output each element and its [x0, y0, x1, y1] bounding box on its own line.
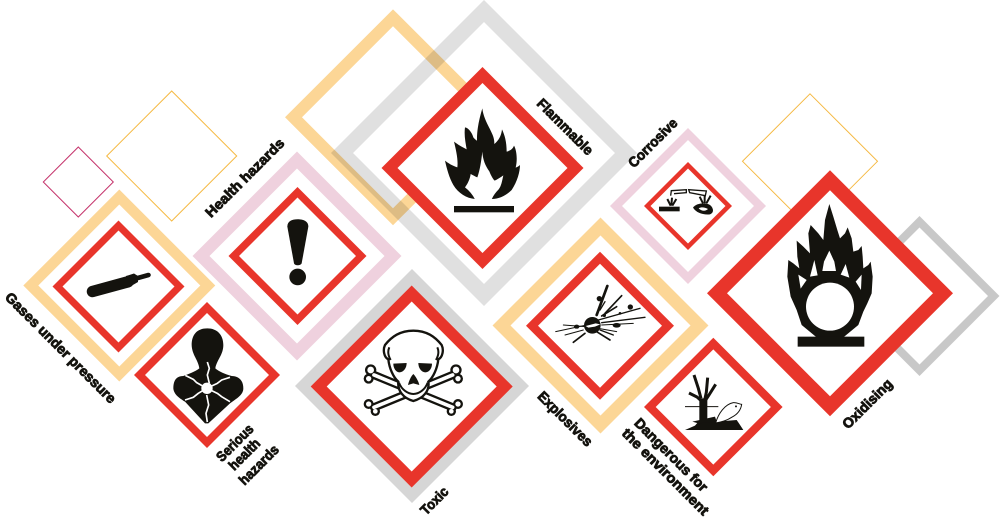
icon: dead tree and fish — [685, 375, 743, 430]
label: health hazards: Health hazards — [202, 135, 288, 220]
label: gases under pressure: Gases under pressure — [2, 289, 120, 406]
panel: dangerous for the environment — [644, 338, 783, 476]
panel: explosives — [502, 226, 700, 424]
panel: toxic — [295, 269, 529, 503]
label: dangerous for the environment: the environment — [619, 425, 713, 519]
frame: grey behind oxidising — [845, 222, 994, 370]
label: serious health hazards: Serious — [213, 421, 257, 465]
panel: health hazards — [201, 160, 393, 352]
icon: exploding bomb — [556, 286, 645, 342]
icon: corrosion test tubes — [659, 190, 713, 214]
label: flammable: Flammable — [534, 95, 597, 158]
icon: human torso with burst — [173, 328, 243, 423]
icon: gas cylinder — [92, 274, 148, 292]
icon: skull and crossbones — [364, 331, 463, 416]
label: serious health hazards: health — [225, 435, 263, 473]
panel: serious health hazards — [134, 302, 280, 448]
icon: flame over circle — [787, 204, 873, 347]
panel: flammable — [382, 67, 584, 269]
icon: flame — [445, 108, 520, 212]
frame: grey behind flammable — [342, 11, 626, 295]
panel: gases under pressure — [31, 197, 208, 374]
label: toxic: Toxic — [417, 483, 452, 518]
outline diamond: orange right — [742, 94, 878, 229]
outline diamond: orange left — [107, 91, 237, 221]
outline diamond: crimson — [43, 147, 113, 217]
label: serious health hazards: hazards — [235, 441, 282, 488]
label: oxidising: Oxidising — [839, 375, 895, 432]
icon: exclamation mark — [287, 219, 308, 285]
label: corrosive: Corrosive — [625, 115, 681, 171]
label: dangerous for the environment: Dangerous for — [631, 415, 712, 495]
frame: peach behind flammable — [294, 18, 492, 217]
panel: corrosive — [616, 134, 760, 278]
label: explosives: Explosives — [535, 388, 596, 450]
panel: oxidising — [707, 170, 953, 416]
label: serious health hazards — [213, 421, 282, 488]
